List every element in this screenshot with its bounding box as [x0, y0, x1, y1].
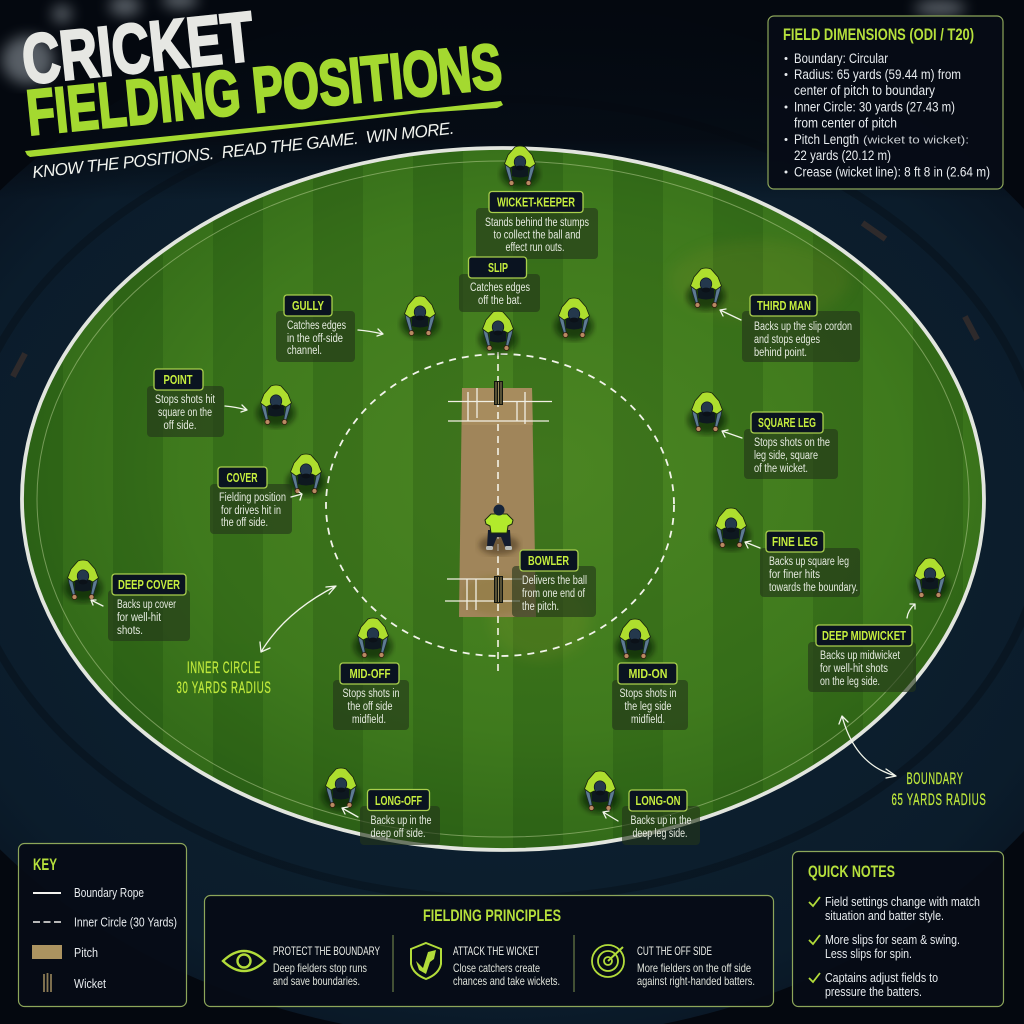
label: third man: and stops edges: [754, 334, 820, 346]
annotation: inner circle: 30 YARDS RADIUS: [176, 678, 272, 697]
tagline: KNOW THE POSITIONS. READ THE GAME. WIN MORE.: [31, 119, 455, 182]
note 3: Captains adjust fields to: [825, 971, 938, 985]
note 2: [809, 933, 960, 961]
label: square leg: [744, 412, 838, 479]
key: pitch: Pitch: [74, 946, 98, 960]
label: third man: behind point.: [754, 347, 807, 359]
fielder: gully side: [401, 296, 439, 338]
label: mid-off: midfield.: [352, 714, 386, 726]
principle: cut the off side: [592, 944, 755, 988]
principle: protect the boundary: PROTECT THE BOUNDARY: [273, 944, 380, 958]
note 2: More slips for seam & swing.: [825, 933, 960, 947]
annotation: inner circle: [176, 658, 272, 697]
panel: field dimensions: [768, 16, 1003, 189]
label: square leg: leg side, square: [754, 450, 818, 462]
label: bowler: Delivers the ball: [522, 575, 587, 587]
label: deep midwicket: Backs up midwicket: [820, 650, 901, 662]
icon: shield: [411, 943, 441, 979]
dimension list: Pitch Length: [794, 132, 859, 147]
dimension list: Inner Circle: 30 yards (27.43 m): [794, 100, 955, 114]
label: cover: the off side.: [221, 517, 268, 529]
label: long-off: Backs up in the: [370, 815, 432, 827]
key: inner circle: Inner Circle (30 Yards): [74, 916, 177, 930]
label: gully: [276, 295, 355, 362]
annotation: boundary: [892, 769, 986, 809]
fielder: second slip: [555, 298, 593, 340]
label: deep midwicket: [808, 625, 916, 692]
arrow: gully: [358, 329, 383, 336]
label: bowler: BOWLER: [528, 553, 569, 568]
label: gully: Catches edges: [287, 320, 346, 332]
principle: cut the off side: More fielders on the off side: [637, 961, 751, 975]
label: gully: in the off-side: [287, 333, 343, 345]
label: third man: Backs up the slip cordon: [754, 321, 852, 333]
playing field: [13, 140, 984, 860]
note 2: Less slips for spin.: [825, 947, 912, 961]
note 3: [809, 971, 938, 999]
label: deep cover: Backs up cover: [117, 599, 176, 611]
label: wicket-keeper: WICKET-KEEPER: [497, 194, 575, 210]
label: slip: Catches edges: [470, 282, 530, 294]
label: mid-on: MID-ON: [628, 666, 668, 681]
fielder: fine leg: [712, 508, 750, 550]
label: fine leg: towards the boundary.: [769, 582, 858, 594]
arrow: third man: [720, 309, 741, 320]
label: deep midwicket: for well-hit shots: [820, 663, 888, 675]
quick notes heading: QUICK NOTES: [808, 862, 895, 881]
principle: attack the wicket: ATTACK THE WICKET: [453, 944, 539, 958]
label: bowler: from one end of: [522, 588, 586, 600]
label: long-on: Backs up in the: [630, 815, 692, 827]
fielder: deep midwicket: [911, 558, 949, 600]
arrow: boundary radius: [839, 716, 896, 778]
fielder: square leg: [688, 392, 726, 434]
note 1: situation and batter style.: [825, 909, 944, 923]
arrow: deep midwicket: [907, 604, 915, 618]
label: deep cover: DEEP COVER: [118, 577, 180, 592]
label: long-on: [622, 790, 700, 845]
label: deep cover: shots.: [117, 625, 143, 637]
label: long-off: [360, 790, 440, 845]
label: long-off: deep off side.: [370, 828, 426, 840]
label: cover: for drives hit in: [221, 505, 281, 517]
inner circle: [326, 354, 674, 656]
arrow: fine leg: [745, 541, 760, 548]
wicket: bottom: [494, 576, 503, 603]
fielder: long-on: [581, 771, 619, 813]
label: slip: [459, 257, 540, 312]
note 3: pressure the batters.: [825, 985, 922, 999]
label: third man: THIRD MAN: [757, 298, 811, 313]
dimension list: Boundary: Circular: [794, 51, 888, 66]
panel: key: [18, 844, 186, 1006]
label: third man: [742, 295, 860, 362]
principle: protect the boundary: [223, 944, 380, 988]
label: cover: COVER: [226, 470, 258, 485]
label: deep cover: [108, 574, 190, 641]
label: bowler: [512, 550, 596, 617]
dimension list: 22 yards (20.12 m): [794, 148, 891, 163]
label: fine leg: FINE LEG: [772, 534, 818, 549]
key: wicket: [44, 973, 106, 992]
dimension list: Radius: 65 yards (59.44 m) from: [794, 67, 961, 82]
label: cover: [210, 467, 292, 534]
principles heading: FIELDING PRINCIPLES: [423, 906, 561, 925]
principle: attack the wicket: [411, 943, 560, 988]
label: long-off: LONG-OFF: [375, 793, 422, 808]
arrow: long-off: [342, 807, 358, 817]
boundary rope: [22, 148, 984, 850]
arrow: cover: [291, 492, 302, 500]
fielder: long-off: [322, 768, 360, 810]
label: slip: off the bat.: [478, 295, 522, 307]
label: mid-on: [612, 663, 688, 730]
arrow: point: [225, 405, 247, 412]
principle: cut the off side: against right-handed batters.: [637, 974, 755, 988]
label: bowler: the pitch.: [522, 601, 559, 613]
label: gully: channel.: [287, 345, 322, 357]
label: mid-on: Stops shots in: [620, 688, 676, 700]
label: long-on: deep leg side.: [632, 828, 688, 840]
key: boundary rope: [33, 886, 144, 900]
label: point: Stops shots hit: [155, 394, 216, 406]
panel: quick notes: [792, 852, 1004, 1006]
wicket: top: [494, 381, 503, 405]
principle: protect the boundary: Deep fielders stop runs: [273, 961, 367, 975]
label: mid-off: the off side: [348, 701, 392, 713]
dimension list: (wicket to wicket):: [863, 134, 969, 146]
fielder: wicket-keeper: [501, 146, 539, 188]
label: mid-off: [333, 663, 409, 730]
label: slip: SLIP: [488, 260, 508, 275]
label: fine leg: Backs up square leg: [769, 556, 849, 568]
label: deep midwicket: on the leg side.: [820, 676, 880, 688]
title line: fielding positions: FIELDING POSITIONS: [23, 30, 505, 149]
icon: eye: [223, 951, 265, 971]
label: point: square on the: [158, 407, 212, 419]
arrow: inner circle radius: [260, 586, 336, 652]
label: point: off side.: [164, 420, 196, 432]
label: wicket-keeper: to collect the ball and: [494, 230, 580, 242]
annotation: boundary: BOUNDARY: [906, 769, 964, 788]
key heading: KEY: [33, 855, 57, 874]
bowler figure: [479, 504, 519, 555]
pitch: [445, 352, 552, 676]
label: square leg: SQUARE LEG: [758, 415, 816, 430]
note 1: [809, 895, 980, 923]
label: point: POINT: [164, 372, 193, 387]
brush underline: [25, 101, 503, 157]
fielder: mid-on: [616, 619, 654, 661]
note 1: Field settings change with match: [825, 895, 980, 909]
dimension list: center of pitch to boundary: [794, 83, 935, 98]
arrow: long-on: [603, 811, 618, 821]
label: wicket-keeper: effect run outs.: [506, 242, 564, 254]
principle: attack the wicket: chances and take wickets.: [453, 974, 560, 988]
dimension list: from center of pitch: [794, 116, 897, 130]
label: wicket-keeper: [476, 192, 598, 259]
panel: fielding principles: [204, 896, 774, 1006]
principle: attack the wicket: Close catchers create: [453, 961, 540, 975]
dimension list: Crease (wicket line): 8 ft 8 in (2.64 m): [794, 164, 990, 180]
arrow: square leg: [722, 430, 742, 438]
label: fine leg: for finer hits: [769, 569, 820, 581]
fielder: deep cover: [64, 560, 102, 602]
label: long-on: LONG-ON: [636, 793, 680, 808]
principle: cut the off side: CUT THE OFF SIDE: [637, 944, 712, 958]
label: cover: Fielding position: [219, 492, 286, 504]
label: deep midwicket: DEEP MIDWICKET: [822, 628, 906, 643]
arrow: deep cover: [91, 600, 103, 606]
fielder: point: [257, 385, 295, 427]
label: mid-off: MID-OFF: [350, 666, 391, 681]
pitch centre line: [497, 352, 499, 676]
key: boundary rope: Boundary Rope: [74, 886, 144, 900]
label: square leg: of the wicket.: [754, 463, 808, 475]
label: fine leg: [760, 531, 860, 597]
fielder: mid-off: [354, 618, 392, 660]
dimension list: [784, 51, 990, 180]
label: mid-on: the leg side: [624, 701, 672, 713]
label: gully: GULLY: [292, 298, 324, 313]
key: pitch: [32, 945, 98, 960]
label: mid-off: Stops shots in: [342, 688, 400, 700]
fielder: cover: [287, 454, 325, 496]
icon: target: [592, 945, 624, 977]
label: mid-on: midfield.: [631, 714, 665, 726]
label: square leg: Stops shots on the: [754, 437, 830, 449]
annotation: inner circle: INNER CIRCLE: [187, 658, 261, 677]
key: wicket: Wicket: [74, 977, 106, 991]
title: [18, 0, 505, 182]
principle: protect the boundary: and save boundaries.: [273, 974, 360, 988]
fielder: third man: [687, 268, 725, 310]
label: deep cover: for well-hit: [117, 612, 162, 624]
label: point: [147, 369, 224, 437]
fielder: slip: [479, 311, 517, 353]
label: wicket-keeper: Stands behind the stumps: [485, 217, 589, 229]
